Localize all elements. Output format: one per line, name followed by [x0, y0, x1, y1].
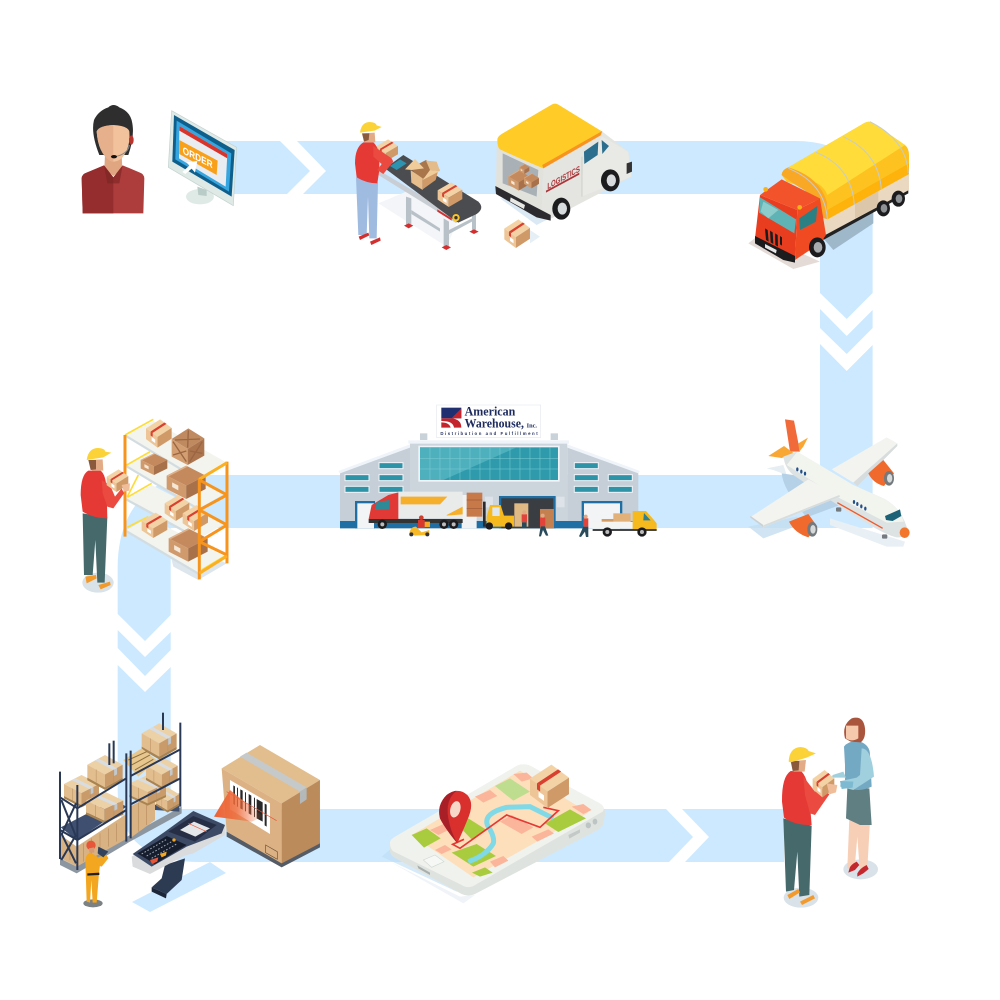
- courier figure: [782, 747, 837, 905]
- label: ORDER: ORDER: [183, 145, 213, 171]
- icon: American Warehouse building: [338, 405, 657, 537]
- rack lower bay: [61, 813, 127, 867]
- icon: worker at orange shelving: [81, 419, 227, 593]
- red lorry: [398, 492, 463, 518]
- yellow flatbed truck: [593, 511, 657, 537]
- warehouse pallets: [467, 493, 482, 517]
- van roof: [497, 104, 602, 168]
- windows: [345, 463, 632, 492]
- scanner grip: [152, 858, 185, 894]
- icon: smartphone with delivery map: [382, 764, 605, 903]
- icon: call centre agent: [82, 105, 144, 213]
- rack uprights: [60, 713, 180, 870]
- pallets: [64, 775, 99, 807]
- scanner operator: [83, 899, 103, 907]
- phone controls: [586, 822, 591, 828]
- sign: American Warehouse logo: [437, 405, 541, 438]
- icon: handheld barcode scanner: [132, 811, 225, 898]
- scooter rider: [409, 515, 430, 536]
- icon: courier handing parcel to customer: [782, 718, 878, 908]
- parcel on phone: [530, 765, 569, 808]
- phone body: [390, 764, 605, 896]
- conveyor belt: [378, 170, 457, 223]
- route: [453, 807, 558, 848]
- sign: American Warehouse logo: Distribution and Fulfillment: [440, 431, 538, 436]
- wings and central block: [340, 445, 410, 528]
- scanner body rim: [132, 812, 225, 874]
- truck canopy: [782, 122, 909, 219]
- icon: monitor showing online order: [168, 111, 237, 206]
- truck cab: [760, 179, 820, 210]
- map: [412, 771, 588, 877]
- truck chassis and bed: [823, 188, 908, 240]
- fuselage: [783, 452, 907, 537]
- icon: barcode scanner shadow: [132, 862, 226, 912]
- van rear bumper: [495, 186, 551, 221]
- shelf parcels: [146, 419, 172, 448]
- near engine: [789, 514, 817, 537]
- landing gear: [836, 507, 841, 512]
- customer figure: [832, 718, 874, 877]
- far wing: [832, 437, 897, 483]
- worker figure: [356, 177, 378, 238]
- warehouse workers: [522, 514, 588, 527]
- sign: American Warehouse logo: Inc.: [527, 422, 537, 429]
- icon: cargo plane: [748, 419, 910, 547]
- shelf yellow rails: [125, 419, 227, 570]
- sign: American Warehouse logo: Warehouse,: [465, 416, 524, 430]
- icon: large parcel with barcode: [214, 745, 320, 867]
- shelf decks: [127, 421, 225, 573]
- shelf orange frame: [125, 435, 227, 579]
- open box: [405, 159, 440, 190]
- far engine: [868, 460, 894, 486]
- map pin: [439, 791, 471, 843]
- icon: red cargo truck: [748, 122, 909, 269]
- tail: [785, 419, 800, 452]
- icon: logistics van: [495, 104, 633, 225]
- river: [468, 807, 553, 862]
- worker figure: [82, 573, 114, 593]
- stripe and windows: [837, 503, 883, 528]
- icon: worker at conveyor: [355, 122, 481, 250]
- flow bands: blue arrow path: [118, 141, 873, 862]
- barcode label: [230, 780, 270, 834]
- forklift: [483, 502, 514, 530]
- conveyor legs: [406, 197, 476, 247]
- sign: American Warehouse logo: American: [465, 405, 515, 419]
- near wing: [750, 479, 840, 527]
- doors: [355, 501, 375, 528]
- icon: warehouse racks with pallets: [60, 713, 182, 907]
- icon: loose parcel: [504, 219, 540, 248]
- label: LOGISTICS: LOGISTICS: [547, 164, 580, 191]
